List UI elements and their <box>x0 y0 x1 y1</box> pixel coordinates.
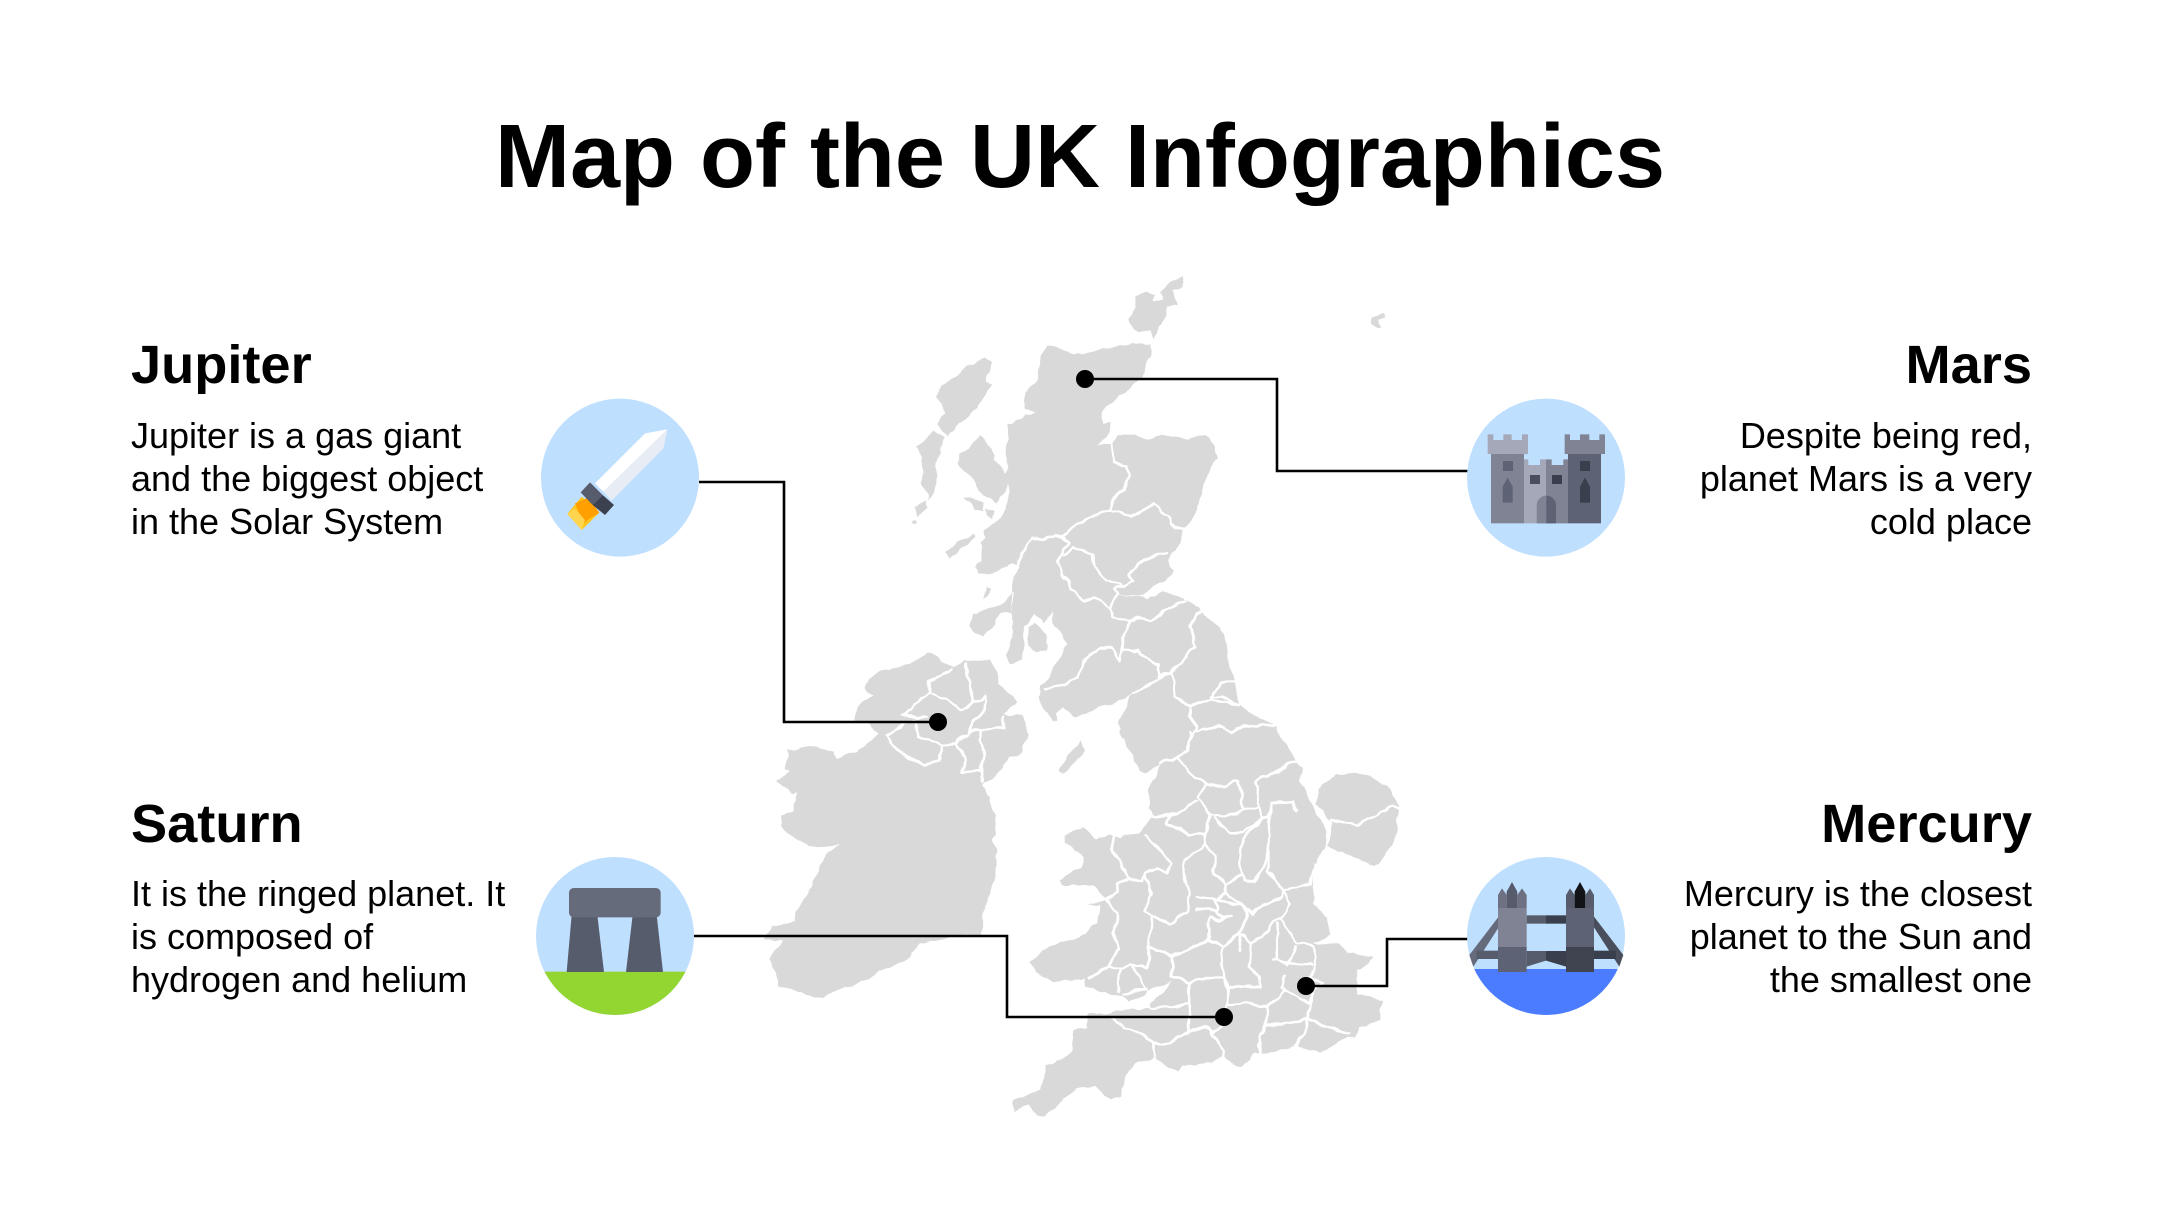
heading: Mars: Mars <box>1906 335 2032 395</box>
text: Jupiter description <box>131 415 483 542</box>
panel: Jupiter <box>131 335 699 557</box>
text: Jupiter description: Jupiter is a gas giant <box>131 415 461 456</box>
text: Mercury description <box>1684 873 2032 1000</box>
map: Scotland and northern England <box>911 278 1386 740</box>
connector: Jupiter <box>699 482 947 731</box>
text: Mercury description: planet to the Sun and <box>1690 916 2032 957</box>
icon: sword <box>541 399 699 557</box>
panel: Mars <box>1467 335 2032 557</box>
text: Saturn description: is composed of <box>131 916 374 957</box>
connector: Mercury <box>1297 939 1470 995</box>
text: Saturn description: hydrogen and helium <box>131 959 467 1000</box>
text: Mars description: planet Mars is a very <box>1700 458 2032 499</box>
icon: castle <box>1467 399 1625 557</box>
text: Jupiter description: and the biggest object <box>131 458 483 499</box>
text: Mercury description: Mercury is the closest <box>1684 873 2032 914</box>
heading: Saturn: Saturn <box>131 794 303 854</box>
text: Mercury description: the smallest one <box>1770 959 2032 1000</box>
text: Saturn description <box>131 873 505 1000</box>
panel: Saturn <box>131 794 700 1018</box>
map: English, Welsh and Ulster region borders <box>888 663 1400 1058</box>
map: Ireland <box>763 653 1029 998</box>
map of the UK and Ireland <box>763 278 1400 1117</box>
icon: Stonehenge <box>533 857 700 1018</box>
connector: Mars <box>1076 370 1470 471</box>
icon: Tower Bridge <box>1467 857 1625 1015</box>
text: Mars description <box>1700 415 2032 542</box>
map: Scottish region borders <box>1018 444 1239 740</box>
text: Saturn description: It is the ringed planet. It <box>131 873 505 914</box>
title: Map of the UK Infographics <box>495 107 1665 207</box>
text: Mars description: Despite being red, <box>1740 415 2032 456</box>
panel: Mercury <box>1460 794 2032 1019</box>
text: Mars description: cold place <box>1870 501 2032 542</box>
connector: Saturn <box>694 936 1233 1026</box>
heading: Jupiter: Jupiter <box>131 335 312 395</box>
map: England and Wales <box>1013 726 1400 1117</box>
text: Jupiter description: in the Solar System <box>131 501 443 542</box>
heading: Mercury: Mercury <box>1821 794 2032 854</box>
map: Isle of Man <box>1059 741 1084 774</box>
